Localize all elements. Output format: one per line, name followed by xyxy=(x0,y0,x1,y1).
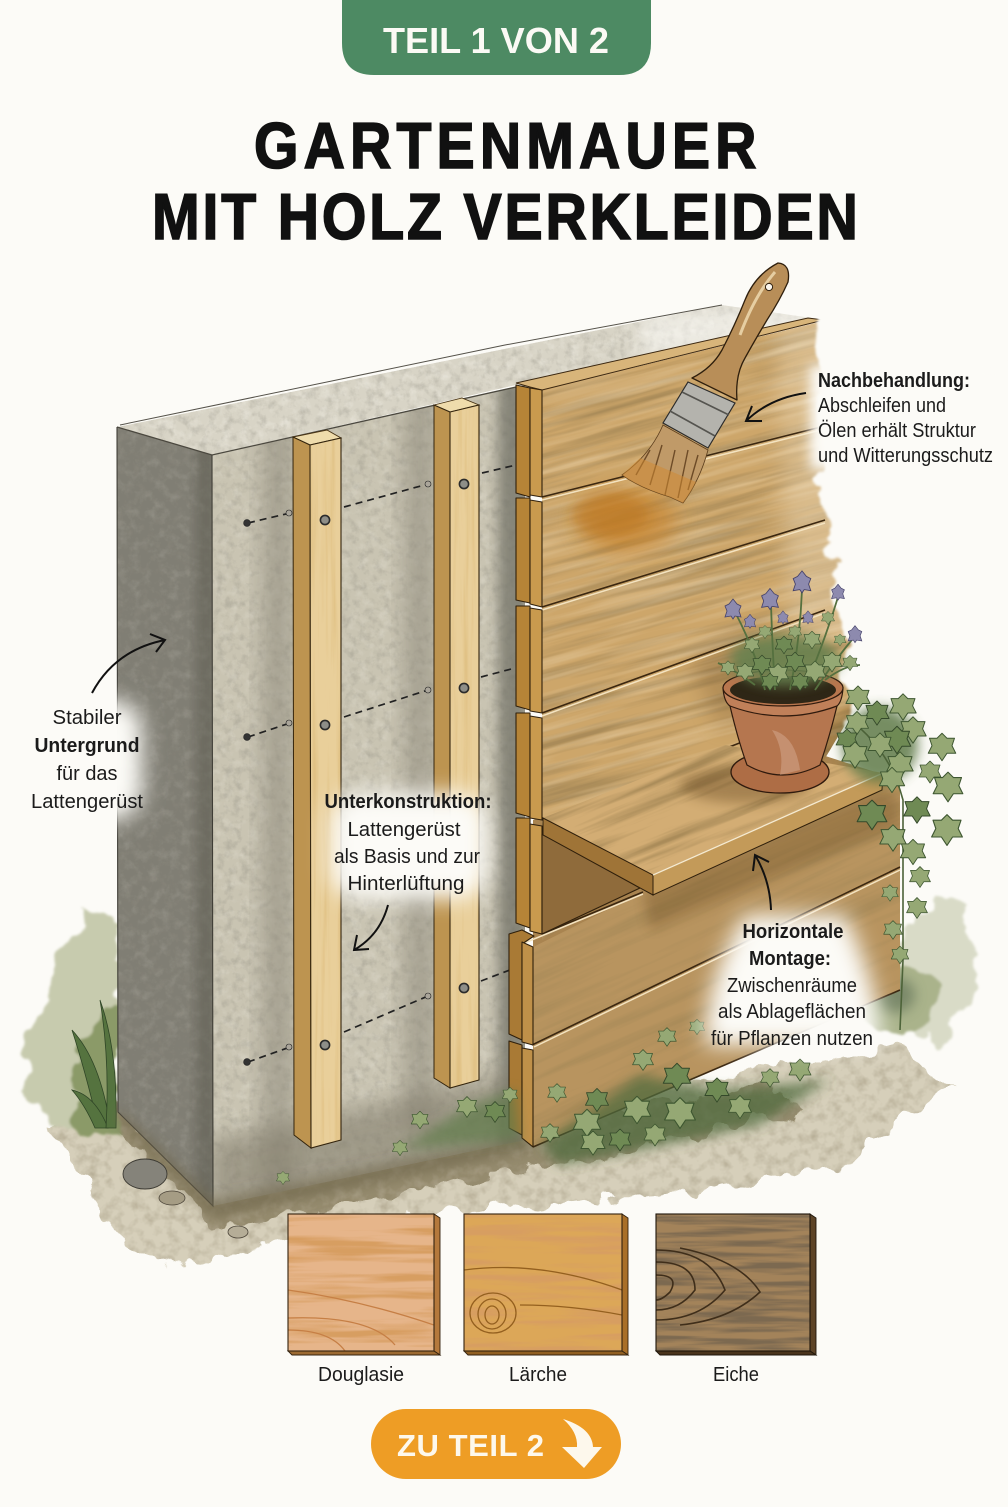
board top ledge xyxy=(516,318,824,390)
brush bristles xyxy=(622,425,708,503)
label: Unterkonstruktion: Hinterlüftung xyxy=(348,873,464,895)
board seams xyxy=(532,426,900,1147)
label: Nachbehandlung xyxy=(810,365,995,470)
ground ivy xyxy=(276,1019,830,1185)
swatch: Eiche xyxy=(656,1214,816,1386)
wooden shelf xyxy=(542,745,883,896)
batten screws xyxy=(320,479,469,1050)
right bush wash xyxy=(866,890,975,1040)
paint brush xyxy=(572,263,789,537)
terracotta pot xyxy=(723,670,843,793)
arrow: to shelf gap xyxy=(753,855,771,910)
title: GARTENMAUER xyxy=(254,110,756,182)
label: Nachbehandlung: Abschleifen und xyxy=(818,395,946,417)
title xyxy=(152,110,858,253)
arrow: to concrete xyxy=(92,634,165,693)
label: Nachbehandlung: Nachbehandlung: xyxy=(818,370,970,392)
label: Nachbehandlung: Ölen erhält Struktur xyxy=(818,420,976,442)
left grass blades xyxy=(72,1000,116,1128)
button: Zu Teil 2: ZU TEIL 2 xyxy=(397,1428,544,1463)
label: Horizontale Montage: Horizontale xyxy=(742,921,844,943)
pot rim xyxy=(723,688,843,716)
label: Unterkonstruktion: als Basis und zur xyxy=(334,846,480,868)
pot body xyxy=(730,706,837,775)
swatch: Douglasie xyxy=(288,1214,440,1386)
left bush wash xyxy=(22,910,118,1130)
label: Stabiler Untergrund: für das xyxy=(56,763,118,785)
swatch: Douglasie: Douglasie xyxy=(318,1364,404,1386)
label: Horizontale Montage: für Pflanzen nutzen xyxy=(711,1028,873,1050)
label: Stabiler Untergrund: Stabiler xyxy=(52,707,122,729)
banner: Teil 1 von 2 xyxy=(342,0,651,75)
lavender plant xyxy=(718,571,862,691)
wall front face xyxy=(205,380,530,1210)
label: Horizontale Montage xyxy=(705,915,880,1050)
concrete wall xyxy=(110,300,830,1220)
arrow: to batten area xyxy=(354,905,388,950)
button: Zu Teil 2 xyxy=(371,1409,621,1479)
icon: curved down arrow xyxy=(562,1419,602,1468)
board backing xyxy=(533,735,900,1147)
banner: Teil 1 von 2: TEIL 1 VON 2 xyxy=(383,20,609,61)
label: Unterkonstruktion: Unterkonstruktion: xyxy=(324,791,492,813)
label: Unterkonstruktion xyxy=(324,791,492,899)
right batten xyxy=(434,398,483,1095)
label: Nachbehandlung: und Witterungsschutz xyxy=(818,445,993,467)
brush handle xyxy=(692,263,789,400)
wooden cladding boards xyxy=(508,318,900,1148)
soil wash xyxy=(50,1050,950,1268)
swatch: Eiche: Eiche xyxy=(713,1364,759,1386)
title: MIT HOLZ VERKLEIDEN xyxy=(152,181,858,253)
wall top face xyxy=(118,305,807,454)
base soil and stones xyxy=(118,1108,530,1238)
soft right edge of painted wood xyxy=(818,290,1008,800)
label: Stabiler Untergrund xyxy=(30,700,143,820)
label: Unterkonstruktion: Lattengerüst xyxy=(348,819,461,841)
pot saucer xyxy=(731,751,829,793)
lower board faces xyxy=(533,786,900,1146)
wall left side face xyxy=(118,428,212,1204)
label: Stabiler Untergrund: Untergrund xyxy=(34,735,140,757)
climbing ivy xyxy=(836,686,963,1030)
ground and planting wash xyxy=(22,890,975,1268)
wall plugs xyxy=(244,481,431,1065)
label: Horizontale Montage: Zwischenräume xyxy=(727,975,857,997)
label: Horizontale Montage: Montage: xyxy=(749,948,831,970)
left batten xyxy=(293,430,345,1155)
board end faces xyxy=(509,385,640,1147)
oil stain xyxy=(572,493,648,537)
arrow: to board surface xyxy=(746,393,806,421)
dashed drill lines xyxy=(248,465,516,1062)
brush ferrule xyxy=(663,382,735,448)
label: Horizontale Montage: als Ablageflächen xyxy=(718,1001,866,1023)
upper board faces xyxy=(542,322,854,940)
swatch: Lärche xyxy=(464,1214,628,1386)
swatch: Lärche: Lärche xyxy=(509,1364,567,1386)
label: Stabiler Untergrund: Lattengerüst xyxy=(31,791,143,813)
